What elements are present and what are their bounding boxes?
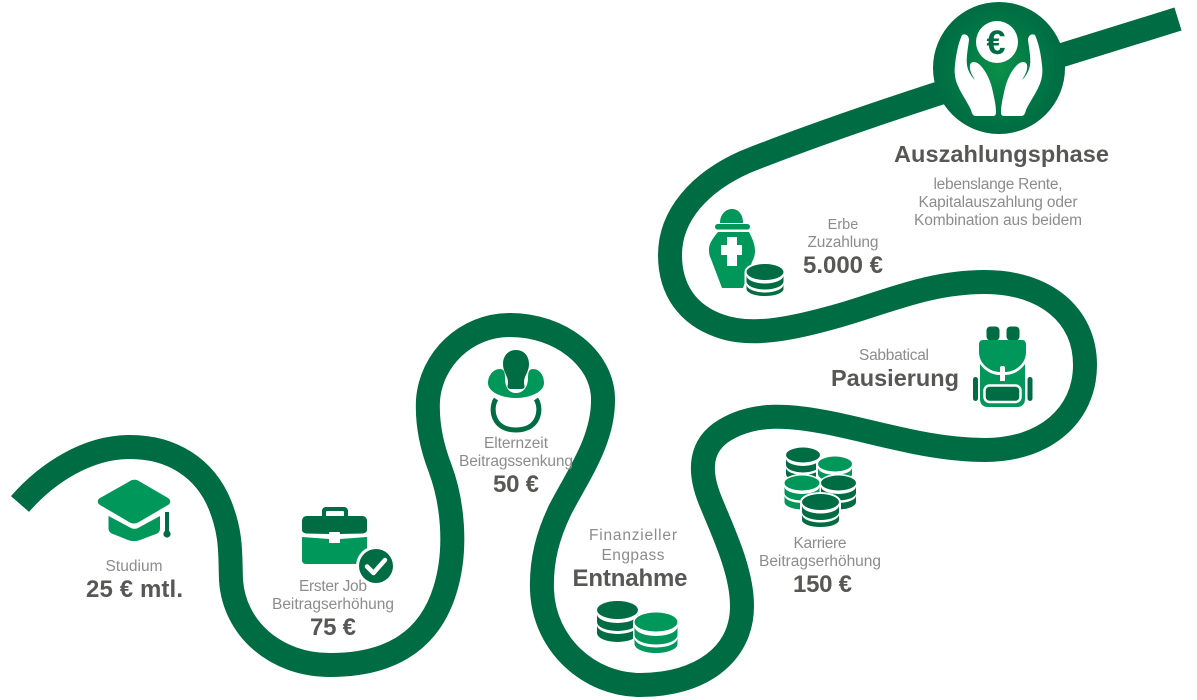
icon: coin pile	[783, 448, 858, 536]
label: Elternzeit: Beitragssenkung	[459, 453, 573, 470]
label: Karriere: 150 €	[793, 571, 852, 598]
label: Elternzeit	[459, 435, 573, 498]
label: Elternzeit: Elternzeit	[484, 435, 549, 452]
label: Karriere: Beitragserhöhung	[759, 553, 881, 570]
label: Erbe: Erbe	[828, 217, 858, 233]
label: Erster Job: Beitragserhöhung	[272, 596, 394, 613]
label: Pausierung: Sabbatical	[859, 347, 929, 364]
icon: graduation cap	[98, 480, 171, 541]
label: Studium: 25 € mtl.	[86, 576, 183, 603]
icon: two coin stacks	[597, 601, 679, 663]
label: Erster Job: Erster Job	[299, 578, 367, 595]
label: Karriere	[759, 535, 881, 598]
icon: euro coin: €	[987, 24, 1006, 62]
icon: left hand	[955, 34, 996, 116]
label: Erster Job: 75 €	[310, 614, 356, 641]
label: Entnahme	[572, 527, 688, 592]
label: Entnahme: Engpass	[602, 547, 665, 564]
label: Elternzeit: 50 €	[493, 471, 539, 498]
label: Pausierung	[831, 347, 959, 391]
label: Erbe	[803, 217, 883, 279]
label: Karriere: Karriere	[794, 535, 846, 552]
medallion: hands holding euro	[933, 2, 1065, 134]
label: Erster Job	[272, 578, 394, 641]
text: payout options: lebenslange Rente,	[934, 176, 1062, 193]
icon: right hand	[1001, 34, 1042, 116]
text: payout options	[914, 176, 1082, 229]
icon: urn	[709, 209, 755, 288]
label: Studium	[86, 558, 183, 603]
text: payout options: Kombination aus beidem	[914, 212, 1082, 229]
heading: Auszahlungsphase: Auszahlungsphase	[894, 141, 1109, 167]
icon: pacifier	[488, 350, 544, 430]
label: Erbe: 5.000 €	[803, 252, 883, 279]
label: Pausierung: Pausierung	[831, 365, 959, 391]
label: Entnahme: Finanzieller	[589, 527, 677, 544]
text: payout options: Kapitalauszahlung oder	[918, 194, 1078, 211]
icon: coin stack at urn	[744, 262, 786, 301]
label: Studium: Studium	[106, 558, 162, 575]
icon: backpack	[973, 326, 1032, 407]
icon: briefcase with check	[302, 507, 396, 586]
label: Erbe: Zuzahlung	[808, 234, 878, 251]
label: Entnahme: Entnahme	[572, 565, 688, 592]
